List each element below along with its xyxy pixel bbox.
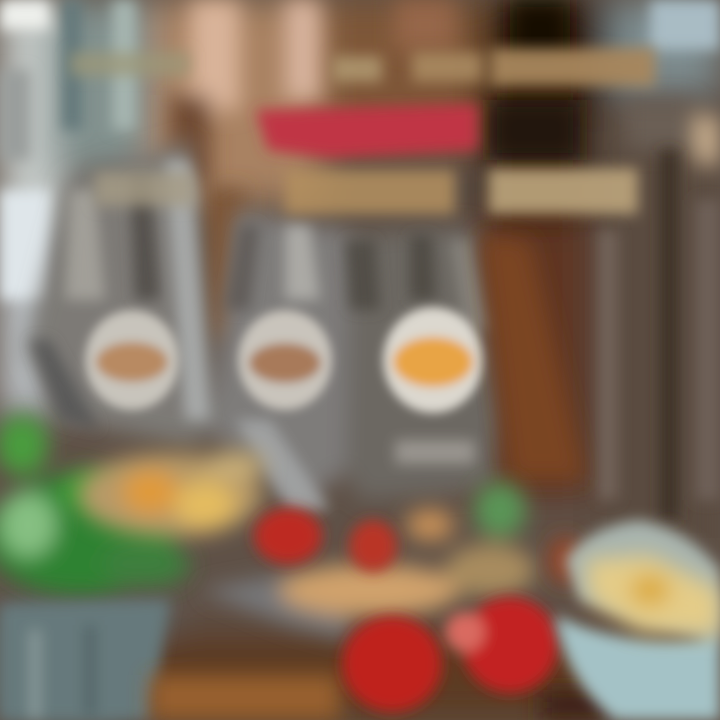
green salad xyxy=(0,415,190,595)
grey bowl on left xyxy=(0,600,170,720)
tomato: front right xyxy=(445,597,558,693)
tomato: left xyxy=(254,508,322,564)
badge: left xyxy=(85,310,179,410)
grey product bags xyxy=(25,140,500,510)
red heading band xyxy=(256,104,478,158)
window highlight xyxy=(0,0,720,300)
badge: middle xyxy=(238,310,332,410)
dark fabric folds xyxy=(598,150,720,520)
tomato: front left xyxy=(342,616,442,712)
blurred second text band xyxy=(95,168,638,214)
badge: right xyxy=(383,307,483,413)
blue bowl on right xyxy=(555,520,720,720)
person and hands xyxy=(170,0,720,340)
pasta in bowl xyxy=(585,555,720,635)
tomato: middle xyxy=(349,520,397,572)
wooden table xyxy=(150,675,610,720)
plate and centre food xyxy=(200,482,535,640)
blurred top text band xyxy=(70,48,655,86)
tomato: small right xyxy=(549,536,581,584)
bag fold stripes xyxy=(30,160,490,510)
yellow pasta xyxy=(78,451,265,537)
brown vertical stripe xyxy=(480,235,585,480)
